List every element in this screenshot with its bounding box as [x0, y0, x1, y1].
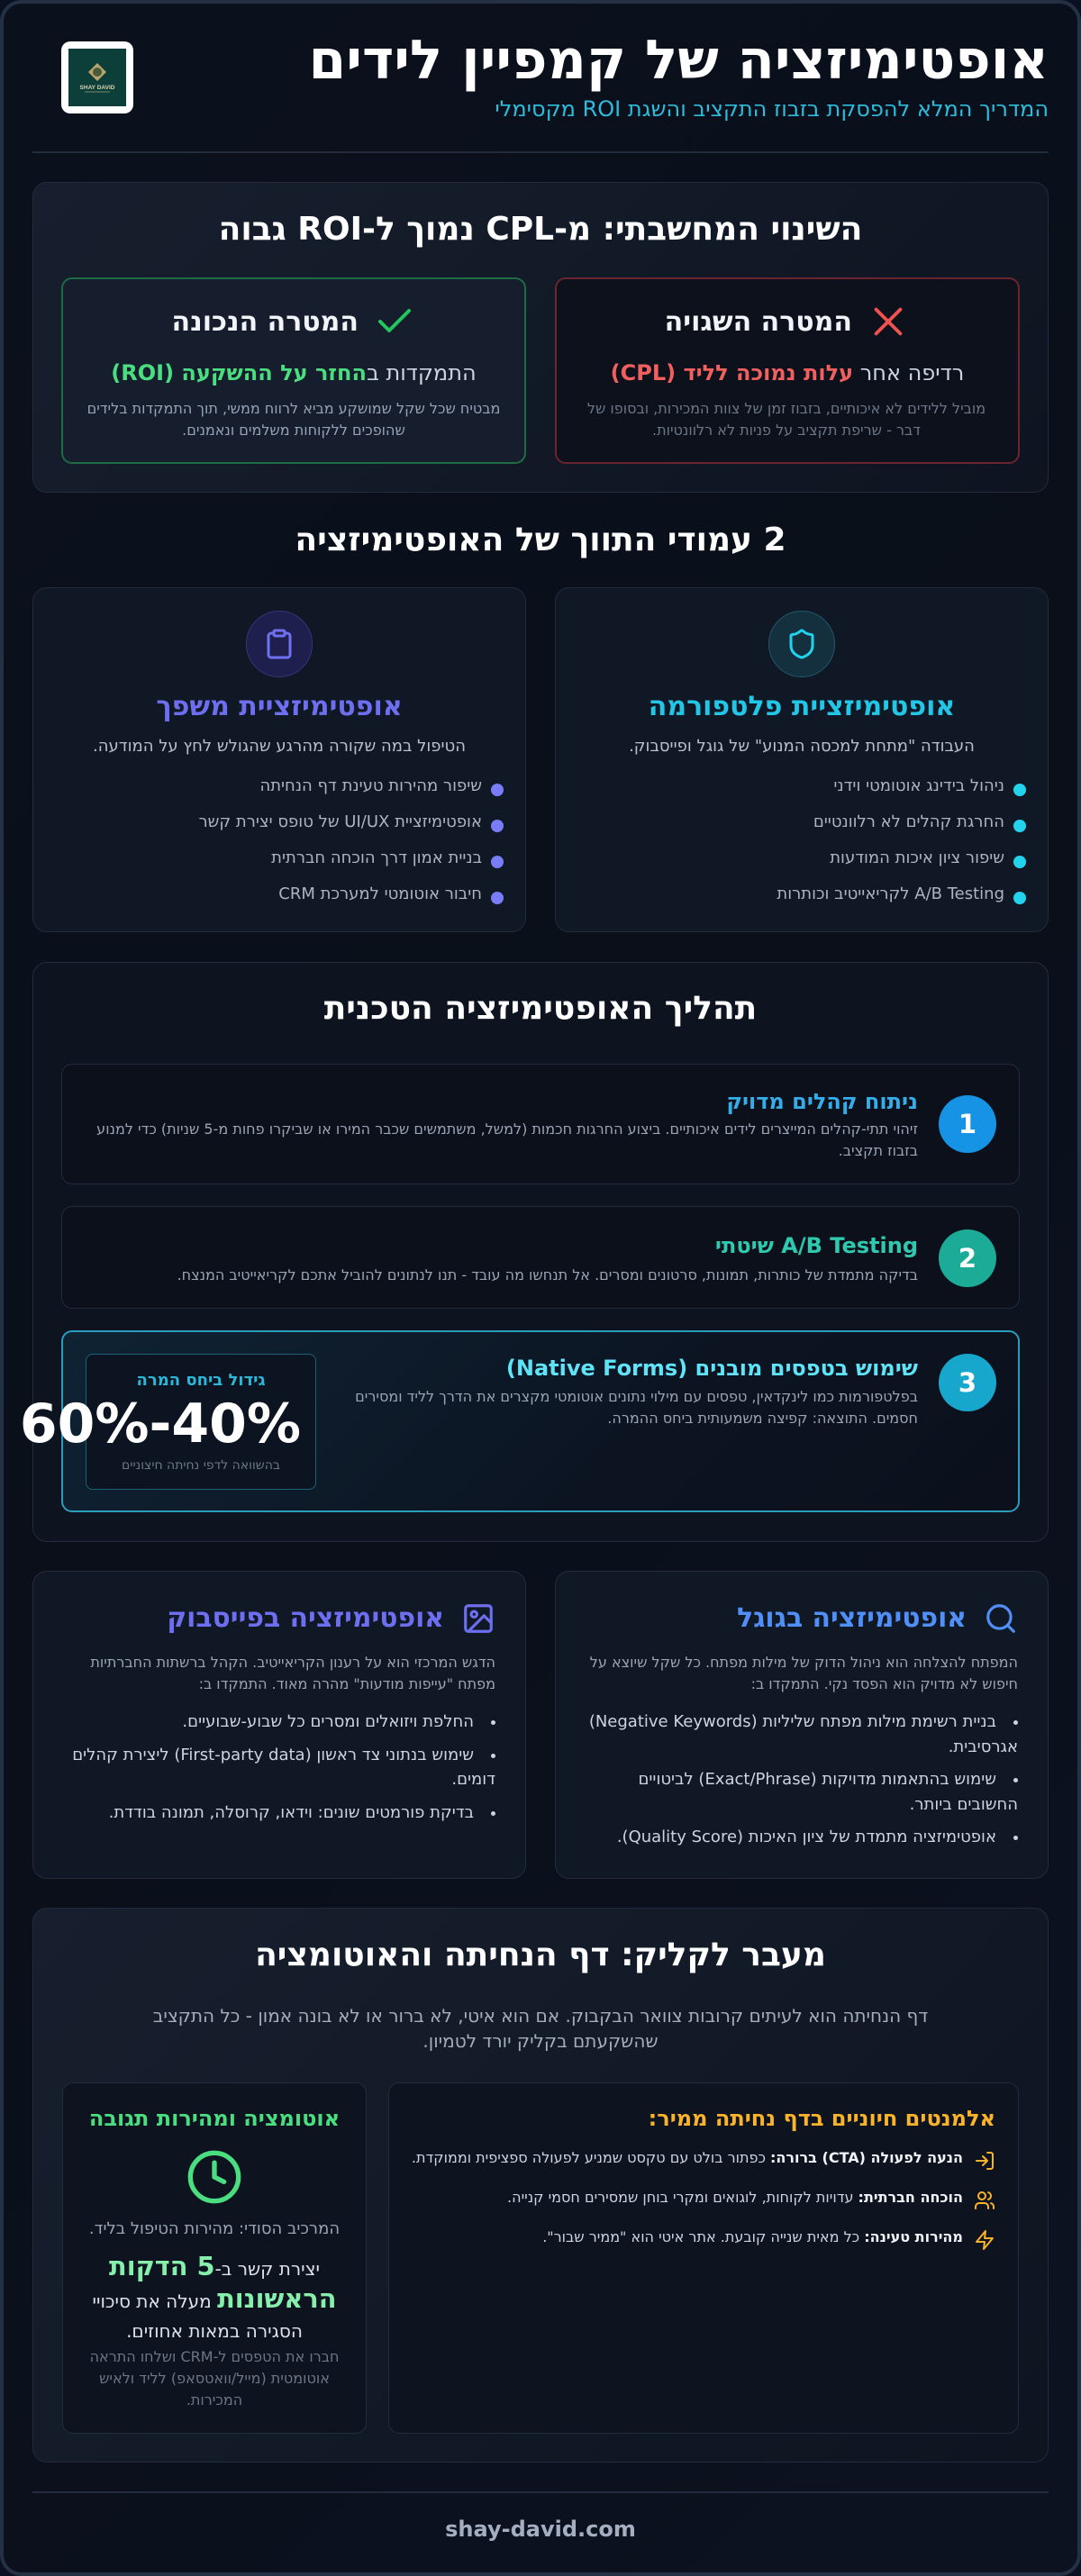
platform list: ניהול בידינג אוטומטי וידני	[833, 776, 1004, 795]
automation lead: המרכיב הסודי: מהירות הטיפול בליד.	[89, 2219, 340, 2238]
icon: clipboard	[246, 611, 313, 677]
panel: funnel optimization	[32, 587, 526, 932]
step 2 text: בדיקה מתמדת של כותרות, תמונות, סרטונים ומסרים. אל תנחשו מה עובד - תנו לנתונים להוביל אתכם לקריאייטיב המנצח.	[177, 1266, 918, 1283]
funnel heading: אופטימיזציית משפך	[156, 691, 403, 722]
facebook list: החלפת ויזואלים ומסרים כל שבוע-שבועיים.	[182, 1712, 474, 1731]
landing page elements card	[388, 2082, 1019, 2434]
funnel list: אופטימיזציית UI/UX של טופס יצירת קשר	[199, 812, 482, 831]
step 1 text: בזבוז תקציב.	[839, 1142, 918, 1159]
automation card	[62, 2082, 367, 2434]
element: social proof	[507, 2189, 995, 2209]
platform list	[777, 776, 1026, 904]
funnel list	[199, 776, 504, 904]
funnel list: שיפור מהירות טעינת דף הנחיתה	[259, 776, 482, 795]
icon: check	[378, 308, 411, 333]
icon: zap	[976, 2230, 994, 2250]
logo: SHAY DAVID	[80, 85, 115, 91]
stat number: 40%-60%	[20, 1392, 301, 1456]
right goal text: מבטיח שכל שקל שמושקע מביא לרווח ממשי, תוך התמקדות בלידים	[87, 400, 500, 417]
intro text	[153, 2005, 928, 2052]
automation heading: אוטומציה ומהירות תגובה	[89, 2106, 340, 2131]
google description: חיפוש לא מדויק הוא הפסד נקי. התמקדו ב:	[751, 1675, 1018, 1692]
icon: x	[874, 308, 903, 335]
automation highlight	[93, 2251, 336, 2342]
platform list: החרגת קהלים לא רלוונטיים	[813, 812, 1004, 831]
google list: שימוש בהתאמות מדויקות (Exact/Phrase) לביטויים החשובים ביותר.	[638, 1770, 1018, 1814]
right goal statement: התמקדות בהחזר על ההשקעה (ROI)	[111, 360, 477, 385]
heading: two pillars: 2 עמודי התווך של האופטימיזציה	[295, 522, 786, 558]
load speed text: מהירות טעינה: כל מאית שנייה קובעת. אתר איטי הוא "ממיר שבור".	[542, 2228, 963, 2245]
facebook list	[72, 1712, 495, 1821]
automation note: חברו את הטפסים ל-CRM ושלחו התראה	[90, 2348, 339, 2365]
step 1	[61, 1064, 1020, 1184]
panel: mindset shift	[32, 182, 1049, 493]
logo	[61, 41, 133, 113]
wrong goal heading: המטרה השגויה	[665, 306, 852, 338]
wrong goal text: דבר - שריפת תקציב על פניות לא רלוונטיות.	[652, 422, 921, 439]
header divider	[32, 151, 1049, 153]
panel heading: השינוי המחשבתי: מ-CPL נמוך ל-ROI גבוה	[219, 211, 862, 248]
google list: בניית רשימת מילות מפתח שליליות (Negative Keywords) אגרסיבית.	[589, 1712, 1018, 1756]
stat box	[86, 1354, 316, 1490]
stat note: בהשוואה לדפי נחיתה חיצוניים	[122, 1458, 280, 1473]
icon: image	[464, 1604, 493, 1633]
element: CTA	[412, 2149, 994, 2170]
step number 3	[939, 1354, 996, 1411]
wrong goal text	[587, 400, 986, 439]
google list	[589, 1712, 1018, 1846]
facebook description	[90, 1654, 495, 1692]
funnel list: בניית אמון דרך הוכחה חברתית	[271, 848, 482, 867]
wrong goal text: מוביל ללידים לא איכותיים, בזבוז זמן של צוות המכירות, ובסופו של	[587, 400, 986, 417]
facebook description: מפתח "עייפות מודעות" מהרה מאוד. התמקדו ב:	[199, 1675, 495, 1692]
icon: clock	[187, 2151, 241, 2203]
panel: facebook optimization	[32, 1571, 526, 1879]
automation note: אוטומטית (מייל/וואטסאפ) לליד ולאיש	[99, 2370, 330, 2387]
automation note	[90, 2348, 339, 2408]
right goal card	[61, 277, 526, 464]
social proof text: הוכחה חברתית: עדויות לקוחות, לוגואים ומקרי בוחן שמסירים חסמי קנייה.	[507, 2189, 963, 2206]
wrong goal card	[555, 277, 1020, 464]
icon: users	[975, 2191, 995, 2209]
facebook heading: אופטימיזציה בפייסבוק	[167, 1602, 444, 1634]
automation note: המכירות.	[186, 2391, 242, 2408]
step number 2: 2	[958, 1243, 977, 1274]
subtitle: המדריך המלא להפסקת בזבוז התקציב והשגת ROI מקסימלי	[495, 96, 1049, 122]
right goal text	[87, 400, 500, 439]
step 3 text: חסמים. התוצאה: קפיצה משמעותית ביחס ההמרה.	[607, 1410, 918, 1427]
google list: אופטימיזציה מתמדת של ציון האיכות (Quality Score).	[617, 1828, 996, 1846]
step number 2	[939, 1229, 996, 1287]
step 1 heading: ניתוח קהלים מדויק	[726, 1089, 918, 1114]
funnel description: הטיפול במה שקורה מהרגע שהגולש לחץ על המודעה.	[93, 737, 466, 756]
step number 1	[939, 1095, 996, 1153]
google description: המפתח להצלחה הוא ניהול הדוק של מילות מפתח. כל שקל שיוצא על	[590, 1654, 1018, 1671]
step 2 heading: A/B Testing שיטתי	[715, 1233, 918, 1258]
intro text: דף הנחיתה הוא לעיתים קרובות צוואר הבקבוק. אם הוא איטי, לא ברור או לא בונה אמון - כל התקציב	[153, 2005, 928, 2027]
step 3 text: בפלטפורמות כמו לינקדאין, טפסים עם מילוי נתונים אוטומטי מקצרים את הדרך לליד ומסירים	[355, 1388, 918, 1405]
panel: beyond the click	[32, 1908, 1049, 2463]
CTA text: הנעה לפעולה (CTA) ברורה: כפתור בולט עם טקסט שמניע לפעולה ספציפית וממוקדת.	[412, 2149, 963, 2166]
footer url: shay-david.com	[445, 2517, 636, 2542]
intro text: שהשקעתם בקליק יורד לטמיון.	[422, 2030, 659, 2052]
title: אופטימיזציה של קמפיין לידים	[309, 29, 1049, 92]
panel: technical process	[32, 962, 1049, 1542]
process heading: תהליך האופטימיזציה הטכנית	[324, 990, 757, 1027]
step number 1: 1	[958, 1109, 977, 1139]
panel heading: מעבר לקליק: דף הנחיתה והאוטומציה	[255, 1937, 826, 1973]
funnel list: חיבור אוטומטי למערכת CRM	[278, 884, 482, 903]
step number 3: 3	[958, 1367, 977, 1398]
panel: google optimization	[555, 1571, 1049, 1879]
step 1 text	[96, 1120, 918, 1159]
automation highlight: יצירת קשר ב-5 הדקות	[109, 2251, 320, 2281]
step 2	[61, 1206, 1020, 1309]
automation highlight: הסגירה במאות אחוזים.	[126, 2320, 303, 2342]
automation highlight: הראשונות מעלה את סיכויי	[93, 2283, 336, 2314]
facebook list: בדיקת פורמטים שונים: וידאו, קרוסלה, תמונה בודדת.	[109, 1803, 474, 1821]
step 3	[61, 1330, 1020, 1512]
right goal text: שהופכים ללקוחות משלמים ונאמנים.	[182, 422, 405, 439]
google description	[590, 1654, 1018, 1692]
header	[61, 29, 1049, 122]
platform list: שיפור ציון איכות המודעות	[830, 848, 1004, 867]
google heading: אופטימיזציה בגוגל	[737, 1602, 967, 1634]
step 3 text	[355, 1388, 918, 1427]
platform list: A/B Testing לקריאייטיב וכותרות	[777, 884, 1004, 903]
panel: platform optimization	[555, 587, 1049, 932]
step 3 heading: שימוש בטפסים מובנים (Native Forms)	[506, 1356, 918, 1381]
wrong goal statement: רדיפה אחר עלות נמוכה לליד (CPL)	[611, 360, 964, 385]
platform heading: אופטימיזציית פלטפורמה	[649, 691, 955, 722]
right goal heading: המטרה הנכונה	[171, 306, 359, 338]
icon: search	[986, 1604, 1015, 1633]
elements heading: אלמנטים חיוניים בדף נחיתה ממיר:	[649, 2106, 995, 2131]
element: load speed	[542, 2228, 994, 2250]
step 1 text: זיהוי תתי-קהלים המייצרים לידים איכותיים. ביצוע החרגות חכמות (למשל, משתמשים שכבר המירו או שביקרו פחות מ-5 שניות) כדי למנוע	[96, 1120, 918, 1138]
stat label: גידול ביחס המרה	[137, 1371, 265, 1390]
platform description: העבודה "מתחת למכסה המנוע" של גוגל ופייסבוק.	[629, 737, 975, 756]
icon: shield	[768, 611, 835, 677]
facebook description: הדגש המרכזי הוא על רענון הקריאייטיב. הקהל ברשתות החברתיות	[90, 1654, 495, 1671]
facebook list: שימוש בנתוני צד ראשון (First-party data) ליצירת קהלים דומים.	[72, 1746, 495, 1789]
footer divider	[32, 2491, 1049, 2493]
icon: log in	[976, 2152, 994, 2170]
